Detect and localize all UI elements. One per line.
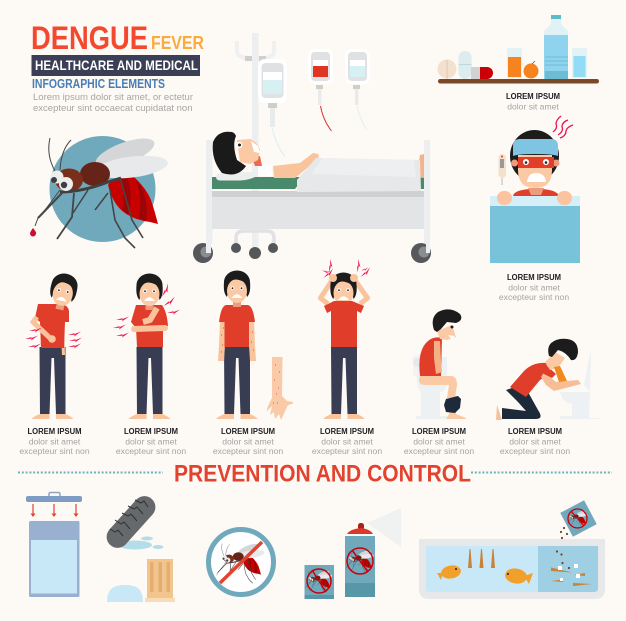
subtitle banner: HEALTHCARE AND MEDICAL bbox=[35, 58, 198, 73]
intro text: Lorem ipsum dolor sit amet, or ectetur bbox=[33, 92, 193, 103]
caption: person 4 bbox=[312, 426, 382, 456]
caption: person 3: dolor sit amet bbox=[222, 436, 274, 446]
iv bag: blood bbox=[308, 49, 333, 131]
iv stand bbox=[231, 33, 278, 259]
subheading: INFOGRAPHIC ELEMENTS bbox=[32, 77, 165, 91]
caption: person 1: LOREM IPSUM bbox=[28, 426, 82, 436]
hospital bed with patient bbox=[193, 132, 431, 263]
fish bbox=[437, 564, 533, 585]
caption: person 2 bbox=[116, 426, 186, 456]
caption: shelf: LOREM IPSUM bbox=[506, 91, 560, 101]
caption: shelf bbox=[506, 91, 560, 112]
shelf with pills and drinks bbox=[438, 15, 599, 84]
icon: tyre and water containers bbox=[102, 492, 175, 602]
icon: mosquito on circle bbox=[30, 133, 169, 248]
icon: rash on arm bbox=[267, 357, 293, 420]
title: dengue: DENGUE bbox=[31, 20, 148, 56]
title: fever: FEVER bbox=[151, 32, 204, 53]
icon: repellent packet bbox=[304, 565, 334, 599]
caption: person 1: dolor sit amet bbox=[29, 436, 81, 446]
icon: covered water container bbox=[26, 492, 82, 597]
caption: person 3: LOREM IPSUM bbox=[221, 426, 275, 436]
person: vomiting bbox=[496, 339, 600, 420]
patient bbox=[213, 132, 424, 192]
title block bbox=[31, 20, 204, 114]
caption: person 4: LOREM IPSUM bbox=[320, 426, 374, 436]
caption: person 1 bbox=[19, 426, 90, 456]
caption: sick person: dolor sit amet bbox=[508, 282, 560, 292]
intro text: excepteur sint occaecat cupidatat non bbox=[33, 103, 192, 114]
caption: person 2: dolor sit amet bbox=[125, 436, 177, 446]
caption: person 5 bbox=[404, 426, 474, 456]
person: rash bbox=[216, 270, 258, 419]
person: diarrhea on toilet bbox=[413, 309, 466, 419]
icon: heat waves bbox=[553, 116, 573, 138]
dead larvae bbox=[551, 568, 592, 586]
caption: person 4: dolor sit amet bbox=[321, 436, 373, 446]
heading: prevention and control: PREVENTION AND CONTROL bbox=[174, 460, 471, 488]
caption: person 6: excepteur sint non bbox=[500, 446, 570, 456]
icon: thermometer bbox=[498, 154, 506, 185]
caption: person 5: LOREM IPSUM bbox=[412, 426, 466, 436]
icon: fish tank bbox=[419, 527, 605, 599]
dotted rule right bbox=[471, 472, 612, 474]
caption: person 3: excepteur sint non bbox=[213, 446, 283, 456]
person: joint pain bbox=[113, 274, 180, 419]
person: stomach ache bbox=[25, 271, 82, 419]
iv bag: fluid bbox=[345, 49, 370, 130]
caption: sick person bbox=[499, 272, 569, 302]
icon: larvicide packet bbox=[560, 500, 597, 537]
caption: shelf: dolor sit amet bbox=[507, 102, 559, 112]
iv bag: saline bbox=[258, 59, 287, 157]
larvae bbox=[468, 549, 495, 568]
caption: sick person: excepteur sint non bbox=[499, 292, 569, 302]
caption: person 3 bbox=[213, 426, 283, 456]
caption: person 4: excepteur sint non bbox=[312, 446, 382, 456]
dotted rule left bbox=[18, 472, 163, 474]
sick person in bed bbox=[490, 116, 580, 263]
granules bbox=[556, 527, 570, 569]
icon: no mosquito sign bbox=[208, 530, 274, 594]
caption: person 6 bbox=[500, 426, 570, 456]
icon: spray can bbox=[345, 508, 401, 597]
caption: person 5: dolor sit amet bbox=[413, 436, 465, 446]
caption: person 2: excepteur sint non bbox=[116, 446, 186, 456]
subtitle banner bbox=[32, 55, 200, 76]
caption: person 2: LOREM IPSUM bbox=[124, 426, 178, 436]
person: headache bbox=[320, 259, 373, 419]
caption: person 1: excepteur sint non bbox=[19, 446, 90, 456]
caption: person 5: excepteur sint non bbox=[404, 446, 474, 456]
caption: person 6: dolor sit amet bbox=[509, 436, 561, 446]
caption: sick person: LOREM IPSUM bbox=[507, 272, 561, 282]
caption: person 6: LOREM IPSUM bbox=[508, 426, 562, 436]
